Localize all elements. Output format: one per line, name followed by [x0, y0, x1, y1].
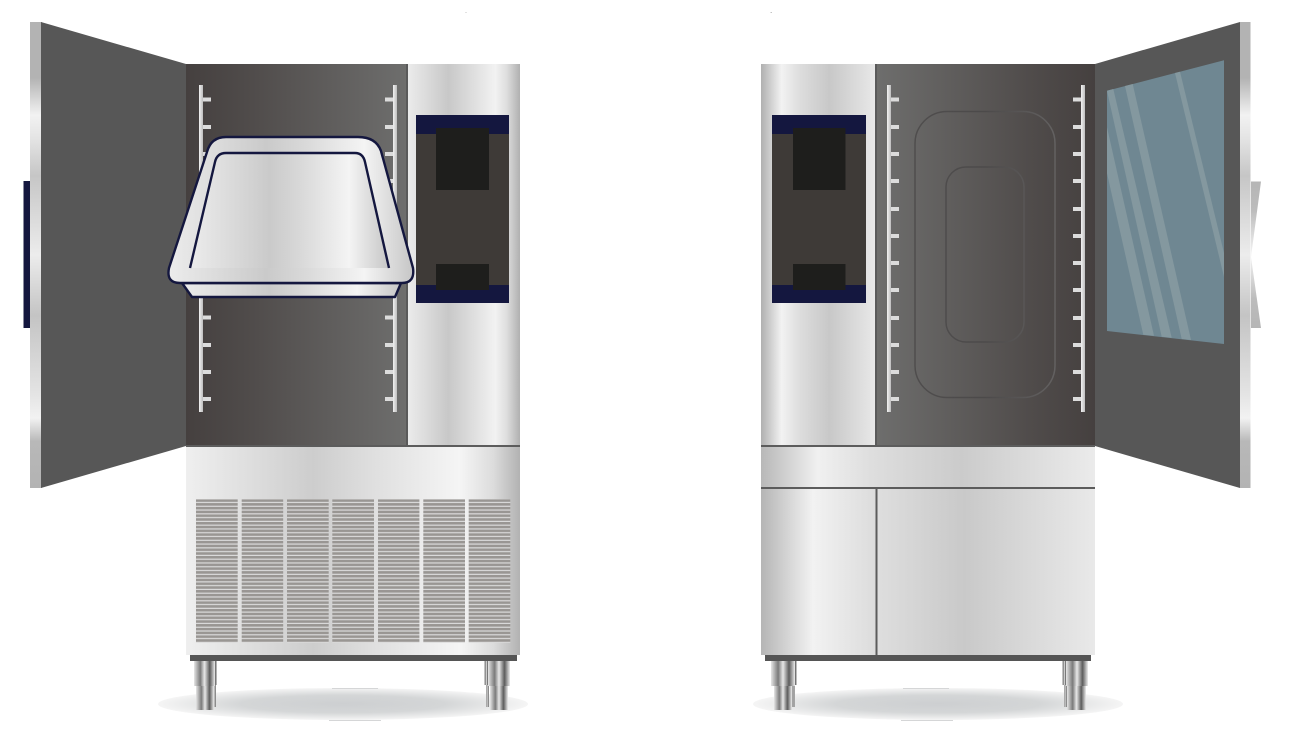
plinth bar: left unit: [190, 655, 517, 661]
control panel: right unit: [772, 115, 866, 303]
door inner panel: right door: [1095, 22, 1240, 488]
stray marks at top: [466, 12, 772, 13]
side column: left unit: [406, 64, 520, 446]
gastronorm tray: [168, 137, 413, 297]
ventilation grille: [196, 499, 510, 643]
door handle: right door: [1251, 182, 1261, 328]
floor shadow: left: [158, 688, 528, 721]
legs: right unit: [771, 661, 1088, 710]
legs: left unit: [194, 661, 510, 710]
door handle: left door: [24, 181, 30, 328]
door edge strip: left door: [30, 22, 42, 488]
oven interior: left unit: [186, 64, 407, 446]
cabinet doors: right unit: [761, 487, 1095, 655]
base cabinet: left unit: [186, 445, 520, 655]
plinth bar: right unit: [765, 655, 1091, 661]
base band: right unit: [761, 445, 1095, 488]
door edge strip: right door: [1240, 22, 1250, 488]
inner fan cover outlines: [915, 112, 1055, 398]
rack rails: right unit: [887, 85, 1085, 412]
floor shadow: right: [753, 688, 1123, 721]
door window with reflections: [1107, 60, 1224, 344]
side column: right unit: [761, 64, 877, 446]
left unit: [24, 22, 528, 721]
right unit: [753, 22, 1261, 721]
rack rails: left unit: [199, 85, 397, 412]
control panel: left unit: [416, 115, 509, 303]
door inner panel: left door: [41, 22, 186, 488]
oven interior: right unit: [876, 64, 1095, 446]
